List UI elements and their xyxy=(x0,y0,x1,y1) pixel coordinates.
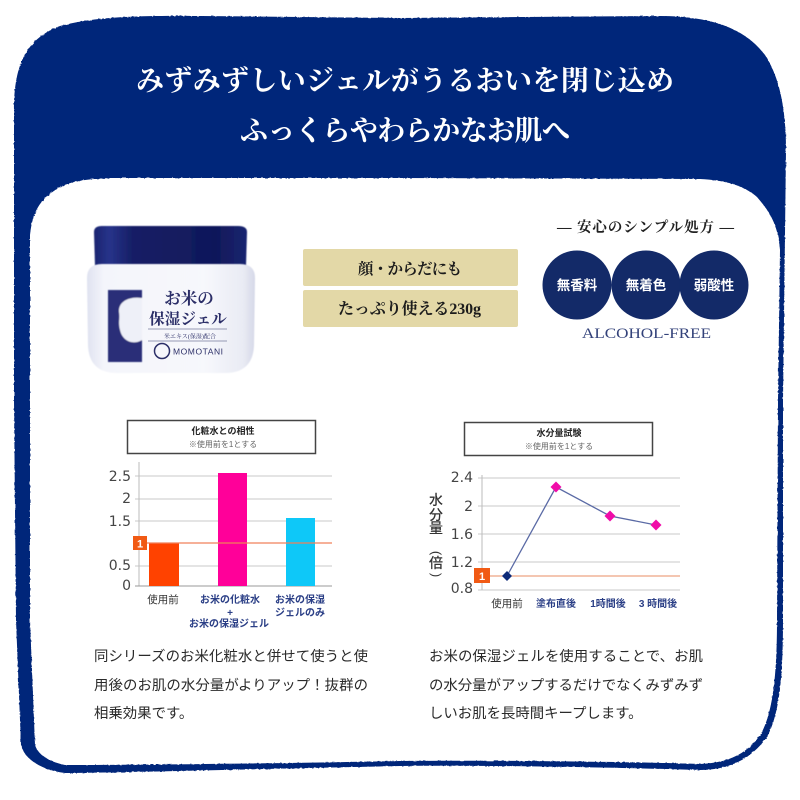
badge: fragrance free xyxy=(542,250,612,320)
text block: right description: しいお肌を長時間キープします。 xyxy=(429,705,643,722)
text block: right description: お米の保湿ジェルを使用することで、お肌 xyxy=(429,648,703,665)
y axis title xyxy=(429,492,444,577)
panel: simple formula xyxy=(542,218,748,342)
y axis values: 0.8 xyxy=(451,581,473,597)
text block: right description xyxy=(429,648,703,722)
y axis values: 2.5 xyxy=(109,469,131,485)
chart: moisture line xyxy=(429,422,680,610)
badge: fragrance free: 無香料 xyxy=(557,277,598,293)
category labels xyxy=(147,593,325,630)
y axis title: 量 xyxy=(429,520,443,536)
icon: product jar xyxy=(87,226,255,373)
category labels: 3 時間後 xyxy=(639,597,677,610)
chart heading box: ※使用前を1とする xyxy=(189,439,257,449)
jar brand xyxy=(148,329,227,358)
chart heading box xyxy=(464,422,652,456)
label: 230g xyxy=(303,290,518,327)
bars xyxy=(149,473,315,586)
jar body xyxy=(87,264,255,373)
text block: left description: 相乗効果です。 xyxy=(94,705,193,722)
baseline badge: 1 xyxy=(137,538,143,550)
category labels: 塗布直後 xyxy=(536,597,576,610)
label: 230g: たっぷり使える230g xyxy=(338,299,481,318)
jar name: 米エキス(保湿)配合 xyxy=(164,332,216,340)
label: face and body: 顔・からだにも xyxy=(358,260,462,278)
badge: colour free: 無着色 xyxy=(626,277,667,293)
badge: colour free xyxy=(612,250,680,320)
y axis title: 水 xyxy=(429,492,443,508)
alcohol free: ALCOHOL-FREE xyxy=(582,326,711,342)
baseline badge xyxy=(474,568,490,583)
category labels: 使用前 xyxy=(147,593,179,606)
label: face and body xyxy=(303,249,518,286)
category labels xyxy=(491,597,677,610)
y axis title: ) xyxy=(429,573,444,577)
y axis values xyxy=(451,470,473,597)
category labels: 使用前 xyxy=(491,597,523,610)
y axis values: 1.5 xyxy=(109,514,131,530)
y axis values: 2 xyxy=(464,499,473,515)
jar brand: MOMOTANI xyxy=(173,346,223,356)
jar lid xyxy=(94,226,247,266)
y axis title: 分 xyxy=(429,507,443,523)
jar name xyxy=(149,289,227,340)
chart heading box: 水分量試験 xyxy=(536,427,582,438)
text block: right description: の水分量がアップするだけでなくみずみず xyxy=(429,677,703,694)
baseline badge xyxy=(133,536,147,550)
text block: left description xyxy=(94,648,368,722)
y axis values: 2.4 xyxy=(451,470,473,486)
y axis values: 0.5 xyxy=(109,558,131,574)
text block: left description: 用後のお肌の水分量がよりアップ！抜群の xyxy=(94,677,368,694)
category labels: お米の保湿 xyxy=(275,593,325,606)
category labels: + xyxy=(227,608,233,619)
title: ふっくらやわらかなお肌へ xyxy=(240,115,570,147)
category labels: 1時間後 xyxy=(590,597,626,610)
y axis values: 2 xyxy=(122,491,131,507)
data markers xyxy=(502,482,662,581)
jar name: 保湿ジェル xyxy=(149,309,227,328)
title: みずみずしいジェルがうるおいを閉じ込め xyxy=(136,65,674,97)
y axis title: ( xyxy=(429,551,444,556)
badge: mildly acidic xyxy=(680,250,748,320)
badge: mildly acidic: 弱酸性 xyxy=(694,277,735,293)
baseline badge: 1 xyxy=(479,571,485,583)
y axis values xyxy=(109,469,131,594)
category labels: お米の化粧水 xyxy=(200,593,260,606)
y axis values: 1.6 xyxy=(451,527,473,543)
formula heading: ― 安心のシンプル処方 ― xyxy=(556,218,734,236)
y axis values: 1.2 xyxy=(451,555,473,571)
title xyxy=(136,65,674,147)
chart heading box: 化粧水との相性 xyxy=(192,425,254,436)
chart heading box xyxy=(128,420,316,454)
text block: left description: 同シリーズのお米化粧水と併せて使うと使 xyxy=(94,648,368,665)
chart: bar compatibility xyxy=(109,420,332,630)
y axis values: 0 xyxy=(122,578,131,594)
category labels: ジェルのみ xyxy=(275,607,325,619)
y axis title: 倍 xyxy=(429,555,443,571)
jar name: お米の xyxy=(164,289,214,308)
panel: beige feature labels xyxy=(303,249,518,327)
data line xyxy=(507,487,656,576)
category labels: お米の保湿ジェル xyxy=(189,617,269,630)
chart heading box: ※使用前を1とする xyxy=(525,441,593,451)
jar label panel xyxy=(108,290,142,362)
